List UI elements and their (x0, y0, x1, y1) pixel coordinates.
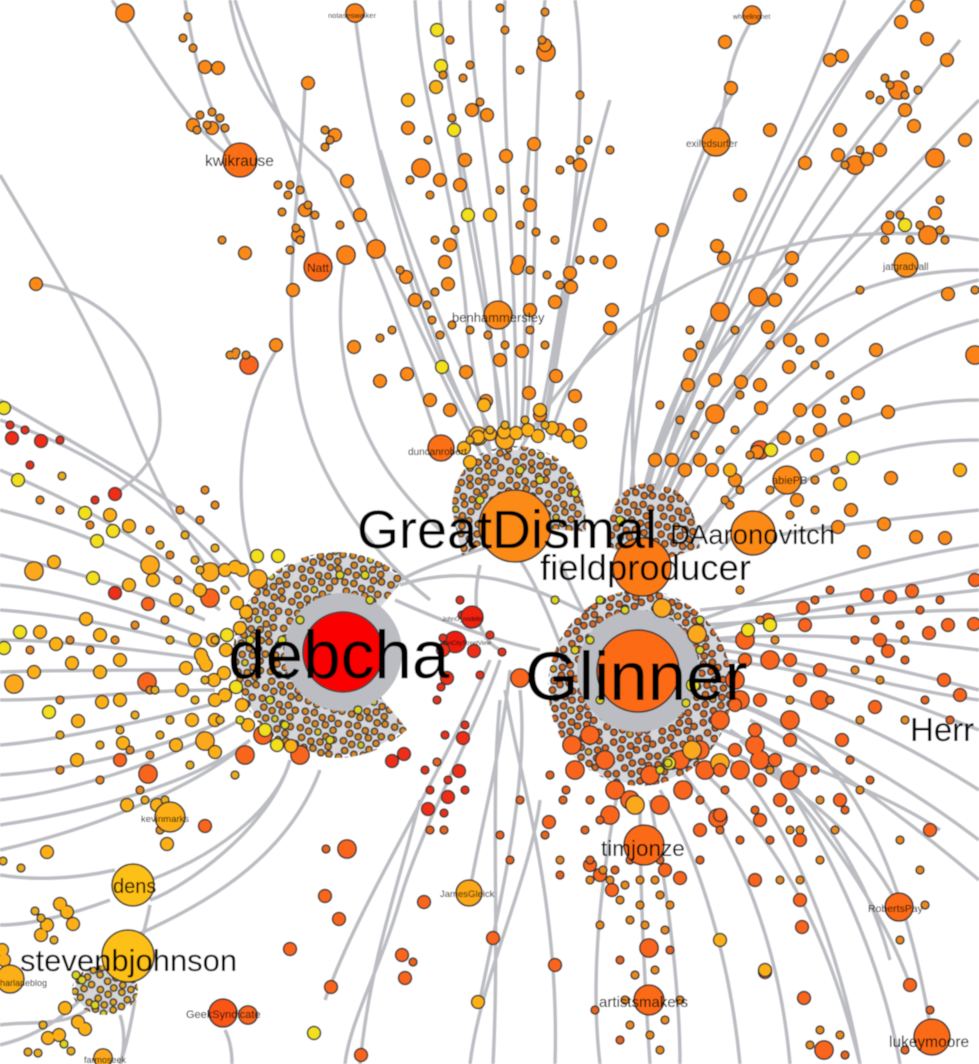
small name labels: kevinmarks (141, 814, 189, 825)
small name labels: artistsmakers (599, 994, 688, 1011)
node: GeekSyndicate (209, 999, 237, 1027)
small name labels: abiePB (772, 475, 807, 487)
node: fieldproducer (613, 538, 671, 596)
node: Glinner (597, 630, 679, 712)
node: benhammersley (484, 301, 512, 329)
label: Herr: Herr (910, 711, 974, 748)
node: lukeymoore (914, 1019, 950, 1055)
label: debcha: debcha (228, 618, 450, 693)
cluster: debcha followers (232, 551, 408, 759)
node: GreatDismal (479, 490, 551, 562)
small name labels: notaseswalker (328, 11, 376, 20)
cluster: Glinner followers (548, 590, 732, 786)
node: exiledsurfer (702, 128, 730, 156)
node: RobertsPay (885, 893, 913, 921)
small name labels: JamesGleick (440, 889, 495, 900)
small name labels: RobertsPay (868, 903, 924, 915)
small name labels: exiledsurfer (686, 139, 738, 150)
small name labels: kwikrause (205, 153, 274, 170)
node: artistsmakers (634, 985, 664, 1015)
node: dens (112, 864, 154, 906)
label: dens: dens (113, 876, 156, 898)
node: kwikrause (223, 143, 257, 177)
node: kevinmarks (155, 802, 185, 832)
small name labels: ManCityStreetView (440, 641, 492, 647)
halo: Glinner (550, 592, 730, 784)
label: stevenbjohnson: stevenbjohnson (20, 943, 237, 978)
small name labels: harlaneblog (0, 978, 47, 988)
label: fieldproducer: fieldproducer (540, 547, 751, 588)
cluster: GreatDismal followers (452, 445, 587, 556)
halo: GreatDismal and fieldproducer clusters (75, 450, 720, 1013)
cluster: fieldproducer followers (609, 482, 700, 558)
small name labels: wheelingnet (732, 14, 770, 21)
small name labels: JohnG_nodelist (442, 617, 484, 623)
gray rings around debcha and Glinner (284, 593, 699, 732)
small name labels: lukeymoore (889, 1034, 969, 1051)
node: JamesGleick (456, 880, 482, 906)
label: DAaronovitch: DAaronovitch (670, 519, 835, 550)
small name labels: benhammersley (452, 310, 545, 325)
label: timjonze: timjonze (601, 836, 685, 861)
small name labels: GeekSyndicate (186, 1009, 261, 1021)
node: timjonze (624, 825, 664, 865)
node: abiePB (773, 466, 801, 494)
small name labels: duncanrobert (408, 447, 467, 458)
large name labels (20, 500, 974, 978)
follower node clusters (72, 446, 732, 1015)
node: stevenbjohnson (102, 930, 154, 982)
node: jatgradvall (894, 253, 918, 277)
node: Natt (304, 253, 332, 281)
small name labels: Natt (307, 261, 330, 275)
small name labels: jatgradvall (882, 262, 929, 273)
node: JohnG_nodelist (461, 606, 483, 628)
node: debcha (303, 612, 383, 692)
node: DAaronovitch (731, 511, 775, 555)
node: harlaneblog (0, 965, 24, 993)
halo: debcha (236, 554, 406, 756)
label: Glinner: Glinner (525, 638, 747, 715)
label: GreatDismal: GreatDismal (357, 500, 657, 560)
node: duncanrobert (428, 435, 454, 461)
cluster: stevenbjohnson followers (72, 965, 138, 1015)
